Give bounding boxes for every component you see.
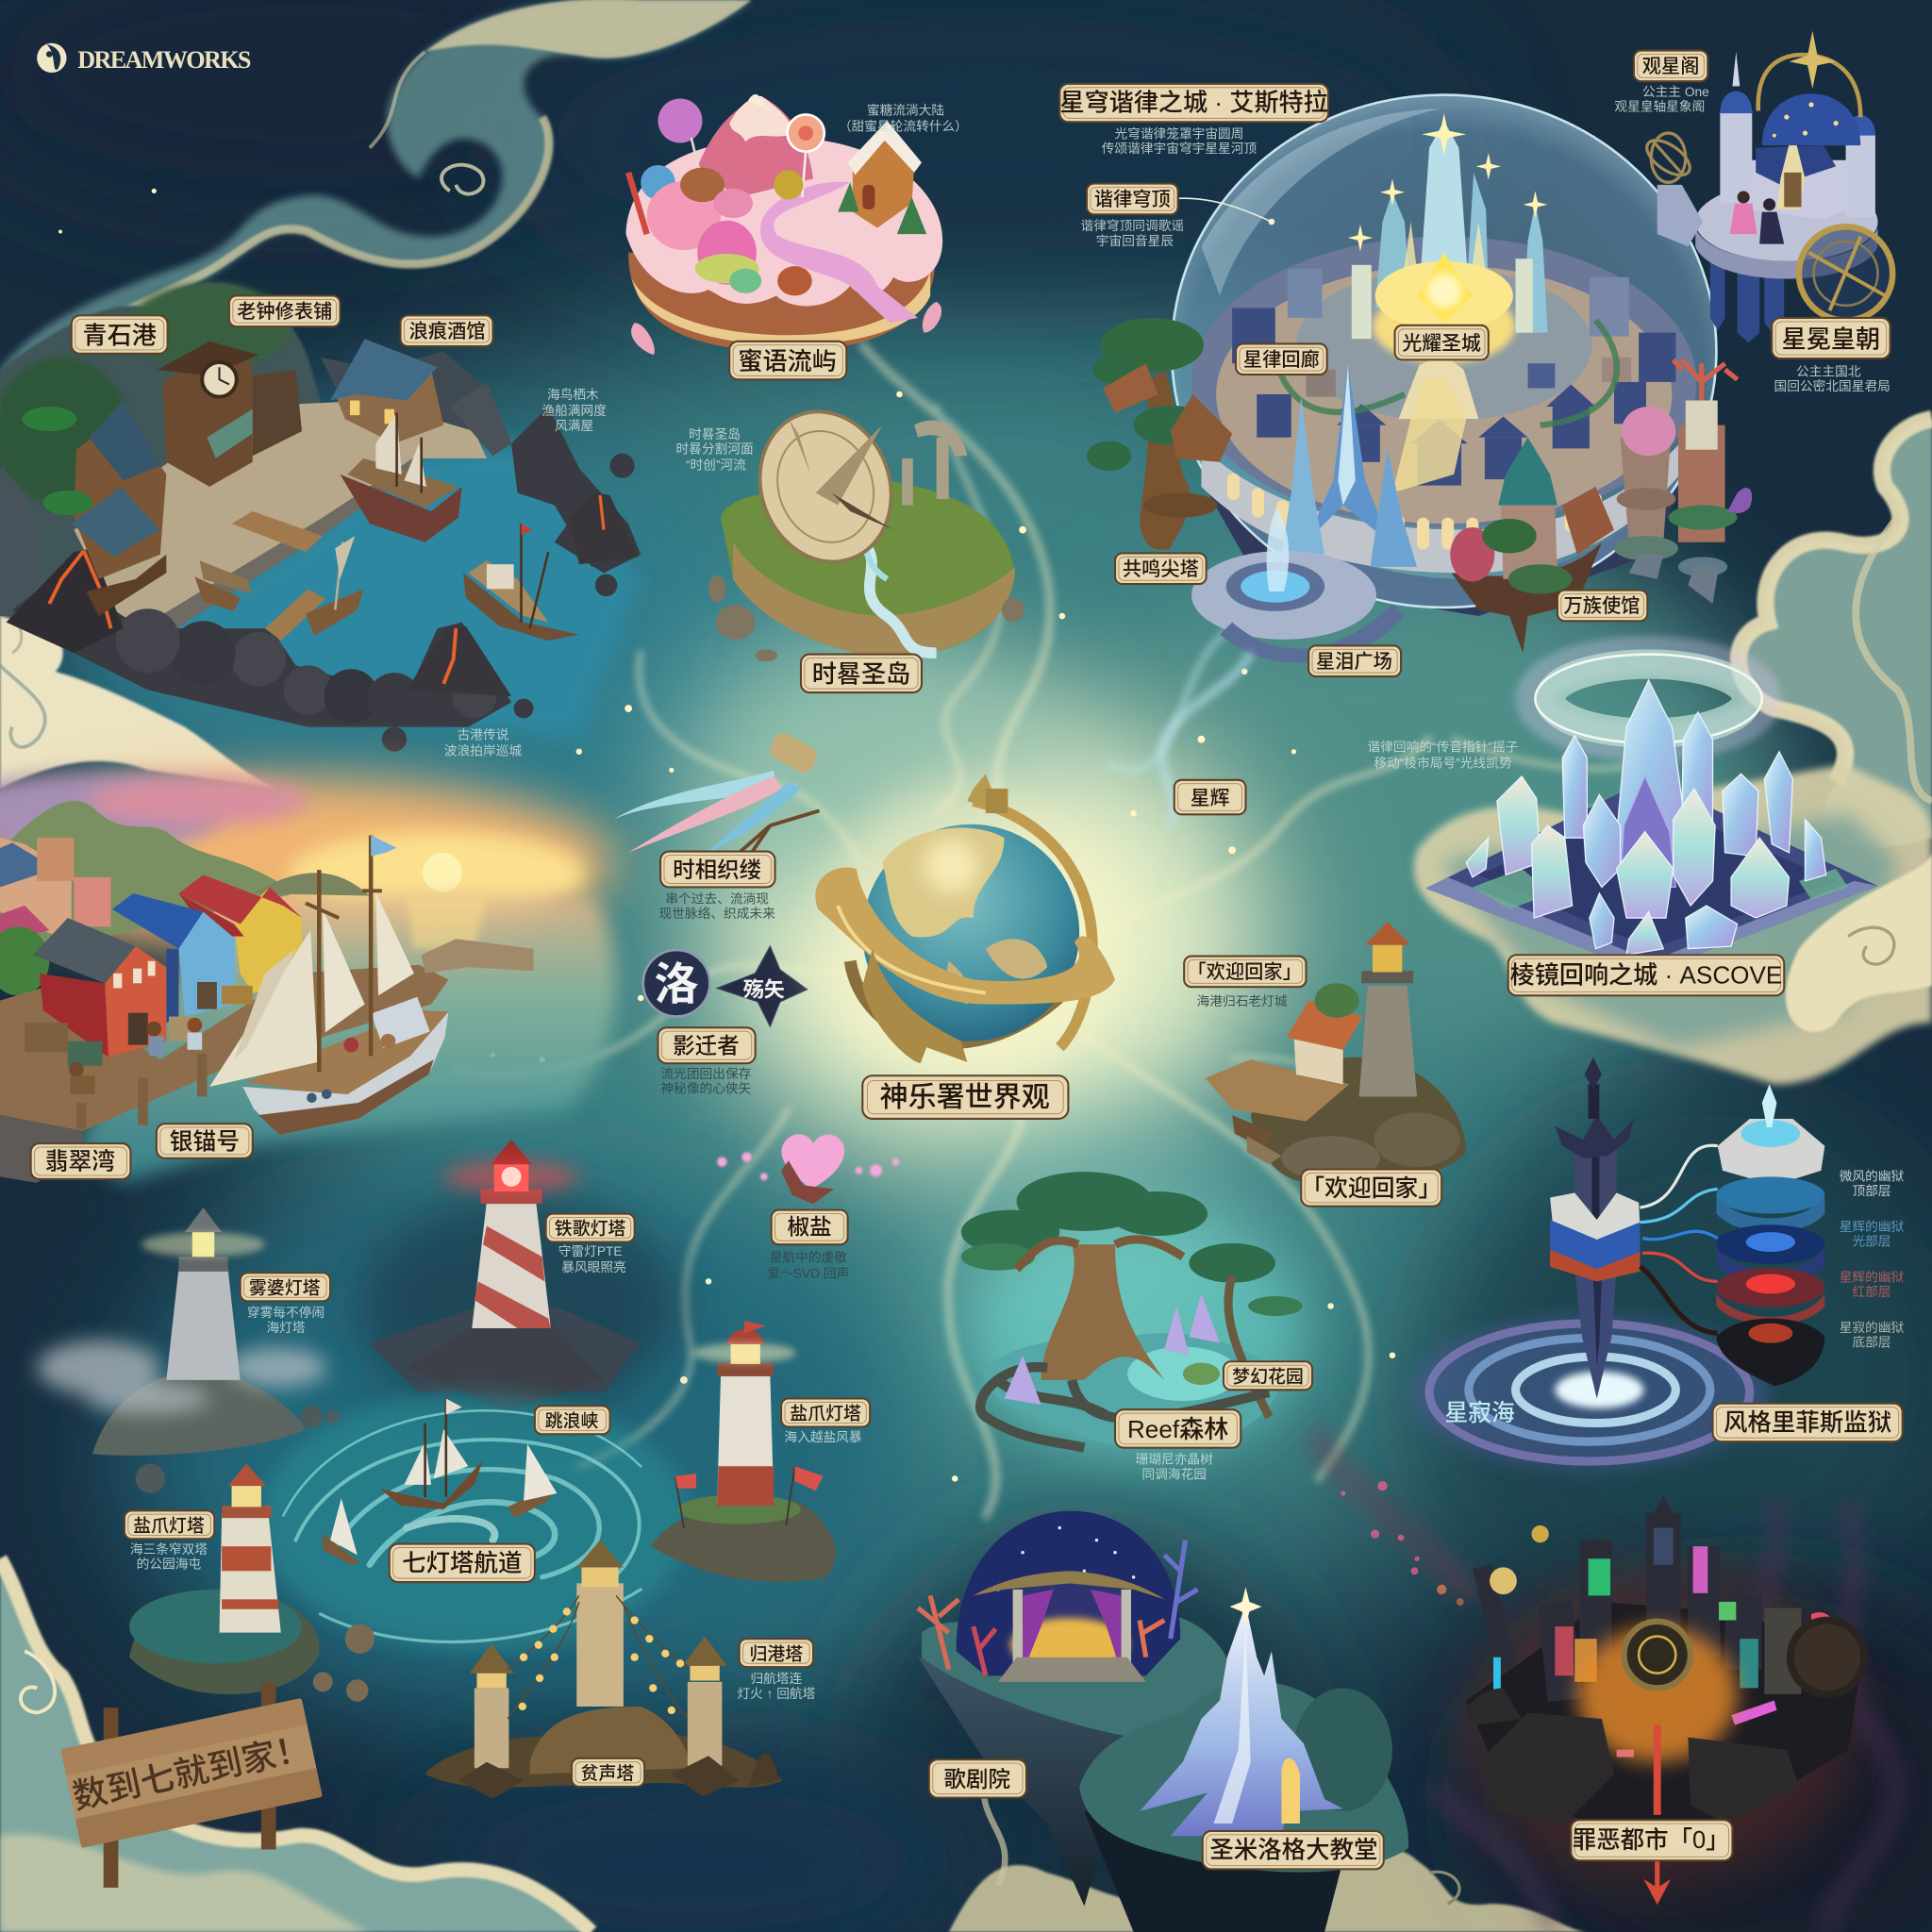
cloud: bottom centre xyxy=(949,1774,1590,1932)
plaque: 归港塔 xyxy=(740,1639,813,1667)
scene: 歌剧院 xyxy=(918,1511,1232,1907)
note: 星穹: 传颂谐律宇宙穹宇星星河顶 xyxy=(1102,142,1257,156)
scene: 星穹谐律之城 dome city xyxy=(1172,95,1716,616)
tea house xyxy=(72,400,166,616)
plaque: 跳浪峡: 跳浪峡 xyxy=(545,1410,599,1431)
icing xyxy=(626,138,942,306)
note: 影迁者: 神秘像的心俠矢 xyxy=(660,1082,752,1096)
plaque: 翡翠湾 xyxy=(31,1143,130,1179)
dock goods xyxy=(25,986,253,1130)
plaque: 青石港 xyxy=(72,315,168,354)
plaque: 圣米洛格大教堂 xyxy=(1203,1831,1384,1869)
note: 雾婆: 海灯塔 xyxy=(266,1321,306,1335)
star dome xyxy=(1762,93,1860,145)
plaque: 银锚号 xyxy=(157,1124,253,1158)
scene: 观星阁 observatory xyxy=(1641,31,1892,342)
plaque: 椒盐 xyxy=(772,1210,848,1244)
sign: 数到七就到家: 数到七就到家！ xyxy=(69,1728,313,1816)
plaque: 光耀圣城: 光耀圣城 xyxy=(1402,333,1481,355)
note: 星穹 xyxy=(1102,125,1257,156)
cloud: beneath crystal city xyxy=(1414,764,1932,1084)
note: 椒盐: 爱～SVD 回声 xyxy=(767,1266,849,1280)
towers xyxy=(1720,111,1752,204)
clock shop xyxy=(158,341,302,487)
plaque: 「欢迎回家」 small xyxy=(1184,957,1306,987)
sign: 数到七就到家 xyxy=(60,1683,323,1888)
note: 蜜糖大陆: 蜜糖流淌大陆 xyxy=(867,103,944,117)
note: 时晷圣岛: 时晷分割河面 xyxy=(675,441,754,457)
icon: 神乐署 globe xyxy=(815,774,1124,1087)
city base xyxy=(1466,1602,1860,1824)
stars on spires xyxy=(1348,113,1547,251)
armillary xyxy=(1641,133,1695,182)
cloud: top swirl xyxy=(0,0,752,419)
sundial xyxy=(740,393,912,580)
scene: 棱镜回响之城 crystal city xyxy=(1425,655,1878,974)
plaque: 影迁者 xyxy=(658,1027,756,1063)
note: 归港塔 xyxy=(737,1671,816,1701)
notes: prison levels: 光部层 xyxy=(1852,1234,1891,1248)
plaque: 风格里菲斯监狱 xyxy=(1713,1404,1903,1441)
note: 时相织缕 xyxy=(658,891,775,921)
ship: fishing boat xyxy=(463,524,579,641)
plaque: 歌剧院 xyxy=(929,1759,1026,1798)
plaque: 星律回廊: 星律回廊 xyxy=(1243,349,1320,371)
cloud: left side xyxy=(0,542,277,789)
plaque: 雾婆灯塔: 雾婆灯塔 xyxy=(249,1277,321,1298)
coral xyxy=(918,1541,1198,1675)
note: 时相织缕: 现世脉络、织成未来 xyxy=(658,907,775,921)
central castle xyxy=(1352,121,1547,339)
plaque: 星律回廊 xyxy=(1236,343,1327,375)
scene: 蜜语流屿 cake island xyxy=(626,94,942,355)
note: 古港传说 xyxy=(444,728,522,758)
harbour water xyxy=(148,443,641,740)
plaque: 神乐署世界观 xyxy=(862,1075,1068,1119)
note: 铁歌 xyxy=(558,1244,626,1274)
note: 星冕皇朝 xyxy=(1774,364,1890,393)
note: 欢迎回家: 海港归石老灯城 xyxy=(1197,993,1288,1008)
rocks xyxy=(708,575,1024,661)
island ground xyxy=(721,480,1015,659)
plaque: 老钟修表铺 xyxy=(229,295,340,326)
red haze and smoke xyxy=(1429,1497,1895,1932)
trunk xyxy=(1041,1244,1164,1380)
badge: 殇矢 star xyxy=(717,946,808,1026)
note: 盐爪 right: 海入越盐风暴 xyxy=(784,1430,862,1444)
pink mountain xyxy=(696,96,813,197)
note: 观星阁 xyxy=(1614,85,1709,114)
note: 古港传说: 波浪拍岸巡城 xyxy=(444,744,522,758)
notes: prison levels: 星辉的幽狱 xyxy=(1840,1220,1905,1234)
crystals in the grove xyxy=(1004,1293,1220,1405)
people xyxy=(69,1018,202,1094)
hills xyxy=(0,801,295,961)
sailboat xyxy=(508,1444,557,1518)
plaque: 梦幻花园 xyxy=(1224,1361,1312,1390)
sword xyxy=(1555,1058,1634,1398)
plaque: 归港塔: 归港塔 xyxy=(749,1643,803,1664)
plaque: 星冕皇朝: 星冕皇朝 xyxy=(1782,325,1880,353)
note: 铁歌: 暴风眼照亮 xyxy=(561,1259,626,1274)
volcanoes xyxy=(7,492,639,696)
back town xyxy=(0,838,111,995)
note: 影迁者 xyxy=(660,1067,752,1096)
scene: coral towers xyxy=(1614,359,1752,604)
towers xyxy=(1473,1496,1802,1702)
plaque: 棱镜回响之城 xyxy=(1508,955,1784,995)
blue house xyxy=(112,893,235,1023)
scene: 罪恶都市 xyxy=(1341,1481,1895,1932)
plaque: 贫声塔 xyxy=(572,1758,644,1787)
red house xyxy=(33,918,166,1058)
under platform xyxy=(1201,443,1700,616)
ring xyxy=(815,868,1115,1004)
stone quay xyxy=(74,400,487,628)
callout line xyxy=(1179,198,1274,225)
notes: prison levels: 底部层 xyxy=(1852,1336,1891,1350)
banners xyxy=(1710,246,1784,342)
body xyxy=(1725,160,1860,219)
note: 海鸟栖木: 渔船满网度 xyxy=(541,404,607,418)
rock column xyxy=(918,1657,1232,1907)
icon: scroll and ribbons xyxy=(613,730,821,857)
notes: prison levels: 微风的幽狱 xyxy=(1840,1169,1905,1183)
note: 观星阁: 观星皇轴星象阁 xyxy=(1614,100,1705,114)
scene: 盐爪灯塔 left xyxy=(129,1464,375,1702)
plaque: 影迁者: 影迁者 xyxy=(673,1034,740,1058)
note: 时晷圣岛 xyxy=(675,427,754,473)
note: 椒盐: 星航中的虔敬 xyxy=(770,1250,847,1264)
plaque: 铁歌灯塔 xyxy=(546,1214,635,1242)
ship: galleon xyxy=(340,413,462,542)
sea xyxy=(74,896,617,1183)
plaque: Reef森林: Reef森林 xyxy=(1127,1415,1228,1443)
plaque: 贫声塔: 贫声塔 xyxy=(581,1763,634,1784)
plaque: 罪恶都市 xyxy=(1571,1820,1732,1860)
silver anchor ship xyxy=(209,836,448,1135)
arrow down xyxy=(1656,1840,1659,1897)
scene: 时晷圣岛 xyxy=(708,393,1024,661)
scene: three lantern towers xyxy=(425,1541,782,1799)
note: 棱镜 xyxy=(1368,740,1519,771)
label: 星寂海: 星寂海 xyxy=(1444,1400,1515,1426)
note: 盐爪 left: 海三条窄双塔 xyxy=(130,1541,208,1557)
plaque: Reef森林 xyxy=(1115,1409,1241,1448)
plaque: 风格里菲斯监狱: 风格里菲斯监狱 xyxy=(1724,1409,1891,1436)
plaque: 神乐署世界观: 神乐署世界观 xyxy=(880,1082,1050,1113)
note: 椒盐 xyxy=(767,1250,849,1280)
logo: DreamWorks: DREAMWORKS xyxy=(77,46,251,74)
plaque: 棱镜回响之城: 棱镜回响之城 · ASCOVE xyxy=(1510,960,1782,989)
city ground xyxy=(1191,237,1697,527)
cliff and hills xyxy=(0,283,492,641)
shard trail xyxy=(1341,1481,1464,1606)
scene: 盐爪灯塔 right xyxy=(651,1321,836,1582)
note: 蜜糖大陆 xyxy=(839,103,968,133)
plaque: 谐律穹顶 xyxy=(1087,184,1178,214)
plaque: 星穹谐律之城: 星穹谐律之城 · 艾斯特拉 xyxy=(1059,89,1328,117)
gold wheel xyxy=(1799,226,1892,321)
plaque: 时相织缕 xyxy=(660,852,775,887)
magic streams xyxy=(456,345,1639,1590)
note: 古港传说: 古港传说 xyxy=(458,728,509,742)
note: 归港塔: 归航塔连 xyxy=(750,1671,803,1686)
cloud: bottom left xyxy=(0,1558,591,1932)
notes: prison levels: 星寂的幽狱 xyxy=(1840,1321,1905,1335)
plaque: 时晷圣岛 xyxy=(801,655,922,692)
gold arc and star xyxy=(1758,55,1860,117)
plaque: 「欢迎回家」 xyxy=(1301,1170,1441,1207)
piers xyxy=(232,511,325,641)
small boats xyxy=(194,536,363,636)
plaque: 观星阁: 观星阁 xyxy=(1642,56,1699,77)
plaque: 七灯塔航道 xyxy=(390,1544,535,1582)
badge: 洛 xyxy=(643,950,709,1017)
note: 海鸟栖木 xyxy=(541,388,607,433)
scene: 圣米洛格大教堂 xyxy=(1079,1587,1408,1932)
stage xyxy=(1017,1577,1127,1657)
yellow house xyxy=(178,874,302,993)
halo xyxy=(1534,655,1763,743)
dome glare xyxy=(1201,108,1441,295)
machine legs xyxy=(1466,1621,1864,1824)
plaque: 时相织缕: 时相织缕 xyxy=(673,858,761,882)
plaque: 万族使馆 xyxy=(1557,591,1647,621)
plaque: 梦幻花园: 梦幻花园 xyxy=(1232,1366,1304,1387)
scene: 雾婆灯塔 xyxy=(37,1208,340,1493)
sun xyxy=(423,853,462,892)
icon: 椒盐 heart xyxy=(717,1134,899,1204)
arcade wall xyxy=(1201,413,1703,573)
figures xyxy=(1730,204,1757,234)
platform xyxy=(1425,778,1878,974)
plaque: 共鸣尖塔: 共鸣尖塔 xyxy=(1123,558,1199,580)
note: 盐爪 left: 的公园海屯 xyxy=(137,1557,201,1572)
plaque: 浪痕酒馆: 浪痕酒馆 xyxy=(409,321,486,342)
scene: 铁歌灯塔 red lighthouse xyxy=(358,1140,677,1417)
plaque: 观星阁 xyxy=(1634,51,1707,81)
note: 观星阁: 公主主 One xyxy=(1642,85,1709,99)
pillar rings xyxy=(1716,1084,1824,1386)
roots xyxy=(980,1367,1269,1448)
note: 星冕皇朝: 国回公密北国星君局 xyxy=(1774,378,1890,393)
plaque: 万族使馆: 万族使馆 xyxy=(1563,595,1640,617)
notes: prison levels: 星辉的幽狱 xyxy=(1840,1270,1905,1284)
plaque: 银锚号: 银锚号 xyxy=(170,1129,240,1156)
plaque: 雾婆灯塔 xyxy=(241,1273,330,1301)
scene: tree house xyxy=(1087,318,1232,550)
vortex xyxy=(1411,1316,1768,1469)
pillars xyxy=(902,421,967,506)
lollipops xyxy=(658,98,702,143)
notes: prison levels xyxy=(1840,1169,1905,1350)
star dome xyxy=(957,1511,1180,1675)
plaque: 浪痕酒馆 xyxy=(400,315,492,346)
galleon xyxy=(379,1398,483,1509)
sails xyxy=(209,930,318,1087)
note: Reef: 同调海花园 xyxy=(1141,1467,1207,1481)
plaque: 盐爪灯塔 right: 盐爪灯塔 xyxy=(790,1404,861,1424)
scene: 七灯塔 swirl sea xyxy=(258,1392,690,1651)
sparkles xyxy=(58,189,1395,1482)
note: 棱镜: 谐律回响的“传音指针”摇子 xyxy=(1368,740,1519,755)
plaque: 星辉: 星辉 xyxy=(1191,788,1230,809)
note: 影迁者: 流光团回出保存 xyxy=(660,1067,752,1081)
sunset sky glow xyxy=(0,774,616,949)
dock xyxy=(0,965,448,1131)
note: Reef xyxy=(1136,1453,1213,1481)
badge: 洛: 洛 xyxy=(655,958,699,1008)
plaque: 椒盐: 椒盐 xyxy=(788,1215,832,1240)
plaque: 翡翠湾: 翡翠湾 xyxy=(45,1149,115,1175)
plaque: 老钟修表铺: 老钟修表铺 xyxy=(237,301,332,323)
note: 星穹: 光穹谐律笼罩宇宙圆周 xyxy=(1114,125,1243,141)
scene: crystal spires xyxy=(1281,365,1417,567)
note: 时晷圣岛: 时晷圣岛 xyxy=(689,427,741,441)
note: 雾婆: 穿雾每不停闹 xyxy=(247,1305,325,1320)
note: 星冕皇朝: 公主主国北 xyxy=(1796,364,1861,378)
scene: 风格里菲斯监狱 xyxy=(1411,1058,1824,1469)
plaque: 铁歌灯塔: 铁歌灯塔 xyxy=(555,1219,626,1240)
crystals xyxy=(1466,680,1826,955)
plaque: 跳浪峡 xyxy=(535,1406,610,1434)
plaque: 盐爪灯塔 left: 盐爪灯塔 xyxy=(133,1516,205,1537)
meridian arc xyxy=(974,801,1092,1047)
candy canes and crumbs xyxy=(628,173,647,234)
note: 棱镜: 移动“棱市局号”光线凯势 xyxy=(1374,756,1512,771)
scene: Reef 森林 tree xyxy=(961,1172,1306,1454)
plaque: 七灯塔航道: 七灯塔航道 xyxy=(402,1550,522,1576)
island top xyxy=(922,1613,1232,1738)
neon panels xyxy=(1490,1525,1838,1776)
plaque: 共鸣尖塔 xyxy=(1115,553,1207,584)
plaque: 星泪广场: 星泪广场 xyxy=(1316,651,1392,673)
badge: 殇矢 star: 殇矢 xyxy=(743,978,785,1002)
plaque: 「欢迎回家」 small: 「欢迎回家」 xyxy=(1187,961,1302,983)
note: 雾婆 xyxy=(247,1305,325,1335)
plaque: 谐律穹顶: 谐律穹顶 xyxy=(1094,189,1171,210)
note: 铁歌: 守雷灯PTE xyxy=(558,1244,623,1258)
plaque: 星冕皇朝 xyxy=(1772,318,1890,358)
balcony xyxy=(1695,182,1878,261)
note: 归港塔: 灯火 ↑ 回航塔 xyxy=(737,1687,816,1701)
scene: 青石港 harbour xyxy=(0,283,641,752)
note: 穹顶: 宇宙回音星辰 xyxy=(1096,233,1174,248)
plaque: 「欢迎回家」: 「欢迎回家」 xyxy=(1301,1175,1441,1202)
palm trees xyxy=(23,407,92,515)
scene: 星泪广场 fountain xyxy=(1161,508,1405,825)
plaque: 歌剧院: 歌剧院 xyxy=(944,1767,1010,1791)
gate xyxy=(1398,355,1478,419)
note: 穹顶: 谐律穹顶同调歌谣 xyxy=(1081,219,1184,233)
glowing gear core xyxy=(1577,1622,1738,1815)
plaque: 圣米洛格大教堂: 圣米洛格大教堂 xyxy=(1209,1838,1378,1864)
plaque: 罪恶都市: 罪恶都市「0」 xyxy=(1573,1827,1730,1854)
plaque: 青石港: 青石港 xyxy=(83,321,157,349)
note: 海鸟栖木: 海鸟栖木 xyxy=(547,388,599,402)
plaque: 时晷圣岛: 时晷圣岛 xyxy=(812,660,910,689)
note: 时晷圣岛: “时创”河流 xyxy=(686,458,746,473)
plaque: 光耀圣城 xyxy=(1395,325,1489,359)
note: 蜜糖大陆: （甜蜜星轮流转什么） xyxy=(839,119,968,133)
cake base xyxy=(628,253,935,351)
city houses xyxy=(1232,269,1675,486)
notes: prison levels: 红部层 xyxy=(1852,1285,1891,1299)
note: 海鸟栖木: 风满屋 xyxy=(555,419,593,433)
scene: 欢迎回家 lighthouse island xyxy=(1205,922,1466,1183)
plaque: 蜜语流屿 xyxy=(729,341,846,379)
dome back xyxy=(1172,95,1716,608)
note: 盐爪 left xyxy=(130,1541,208,1572)
note: Reef: 珊瑚尼亦晶树 xyxy=(1136,1453,1213,1467)
plaque: 星泪广场 xyxy=(1308,645,1401,676)
tavern xyxy=(330,339,443,443)
pink river xyxy=(760,182,918,323)
scene: 万族使馆 embassy xyxy=(1450,438,1614,653)
sweets xyxy=(647,181,721,250)
note: 穹顶 xyxy=(1081,219,1184,248)
gingerbread house xyxy=(853,133,914,228)
stone block xyxy=(1550,1192,1640,1281)
plaque: 星辉 xyxy=(1174,780,1245,814)
plaque: 盐爪灯塔 right xyxy=(781,1398,870,1426)
rock belt xyxy=(12,382,641,752)
canopy xyxy=(961,1172,1303,1316)
sailboat xyxy=(323,1498,359,1565)
cloud: right side xyxy=(1739,419,1932,847)
plaque: 盐爪灯塔 left xyxy=(125,1510,214,1539)
note: 时相织缕: 串个过去、流淌现 xyxy=(665,891,769,906)
connector wires xyxy=(1640,1145,1718,1333)
plaque: 蜜语流屿: 蜜语流屿 xyxy=(738,347,837,375)
scene: 翡翠湾 sunset bay xyxy=(0,774,617,1183)
notes: prison levels: 顶部层 xyxy=(1852,1184,1891,1198)
